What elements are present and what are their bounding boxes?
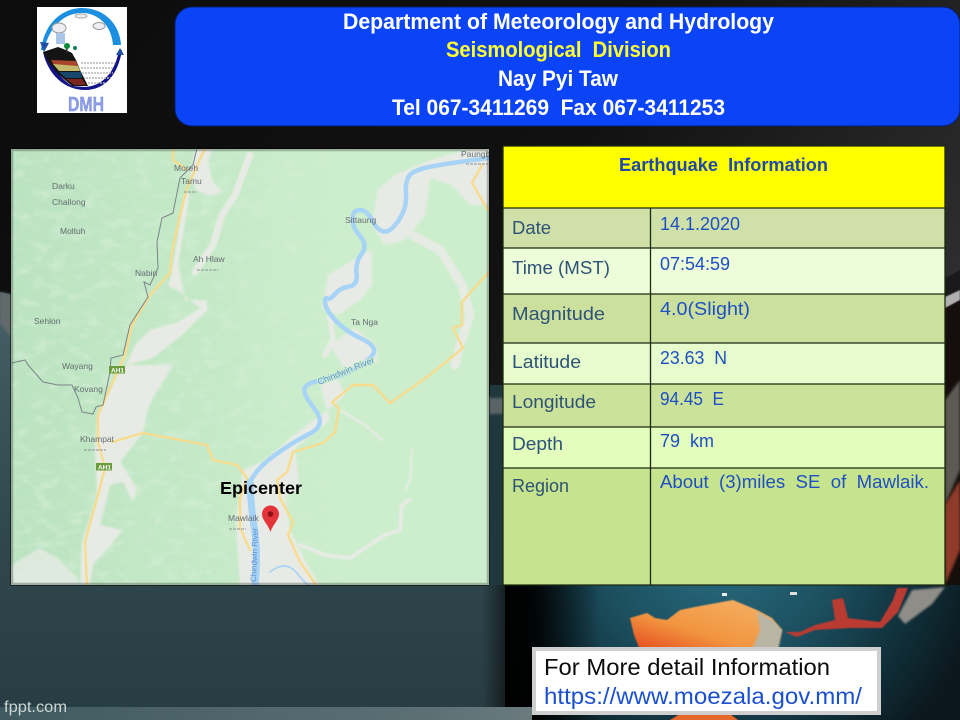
icon: arrow heads [40,42,124,55]
map place labels: Tamu [181,176,202,186]
AH1 road badges: AH1 [98,464,111,472]
lowland areas [11,149,489,585]
local script label marks [84,164,488,529]
footer credit: fppt.com [4,699,67,716]
map place labels: Wayang [62,361,93,371]
row: magnitude [503,294,945,343]
map edge shadow [12,150,488,584]
map place labels [34,149,501,582]
map place labels: Sehlon [34,316,61,326]
map place labels: Moltuh [60,226,86,236]
icon: trees [64,43,77,53]
map place labels: Paungbyin [461,149,501,159]
map place labels: Khampat [80,434,115,444]
row: region: About (3)miles SE of Mawlaik. [660,472,929,492]
AH1 road badges [96,366,125,472]
table grid lines [503,146,945,585]
row: time [503,248,945,294]
map place labels: Kovang [74,384,103,394]
text: more detail: For More detail Information [544,654,830,680]
rivers [250,158,489,585]
row: depth [503,427,945,468]
icon: lower navy cycle arc [43,50,122,90]
map place labels: Mawlaik [228,513,259,523]
row: longitude: Longitude [512,392,596,412]
text: telephone and fax: Tel 067-3411269 Fax 067-3411253 [392,95,725,120]
row: region [503,468,945,585]
row: latitude: Latitude [512,352,581,372]
panel: earthquake information table [503,146,945,585]
map place labels: Ah Hlaw [193,254,226,264]
AH1 road badges: AH1 [111,368,124,374]
globe with continents [505,380,960,720]
minor valleys [172,155,470,558]
row: date: Date [512,218,551,238]
map place labels: Ta Nga [351,317,378,327]
row: time: 07:54:59 [660,254,730,274]
panel: epicenter map [10,148,501,586]
banner: department header [175,7,960,126]
icon: hill with strata [43,47,88,86]
table header: Earthquake Information [619,155,828,175]
row: longitude [503,384,945,427]
row: latitude [503,343,945,384]
row: time: Time (MST) [512,258,610,278]
map place labels: Darku [52,181,75,191]
map place labels: Sittaung [345,215,376,225]
map place labels: Chindwin River [249,528,260,582]
text: city: Nay Pyi Taw [498,66,619,91]
logo text: DMH [68,94,104,116]
row: depth: 79 km [660,431,714,451]
label: epicenter: Epicenter [220,478,302,498]
icon: upper blue cycle arc [41,8,121,50]
map place labels: Challong [52,197,86,207]
row: latitude: 23.63 N [660,348,727,368]
table header [503,146,945,208]
map place labels: Moreh [174,163,198,173]
row: region: Region [512,476,569,496]
row: magnitude: Magnitude [512,304,605,324]
roads [85,148,489,585]
map place labels: Nabin [135,268,157,278]
heading: division: Seismological Division [446,37,671,62]
row: depth: Depth [512,434,563,454]
heading: department name: Department of Meteorology and Hydrology [343,9,775,34]
row: magnitude: 4.0(Slight) [660,299,750,319]
row: longitude: 94.45 E [660,389,724,409]
country border [12,148,197,414]
link: website: https://www.moezala.gov.mm/ [544,683,863,709]
row: date [503,208,945,248]
row: date: 14.1.2020 [660,214,740,234]
callout: more information link [532,647,881,715]
map place labels: Chindwin River [316,355,376,387]
icon: clouds and rain [52,14,105,44]
logo: DMH [37,7,127,116]
icon: epicenter pin [262,506,279,532]
footer strip [0,707,532,720]
icon: water lines [81,63,115,83]
